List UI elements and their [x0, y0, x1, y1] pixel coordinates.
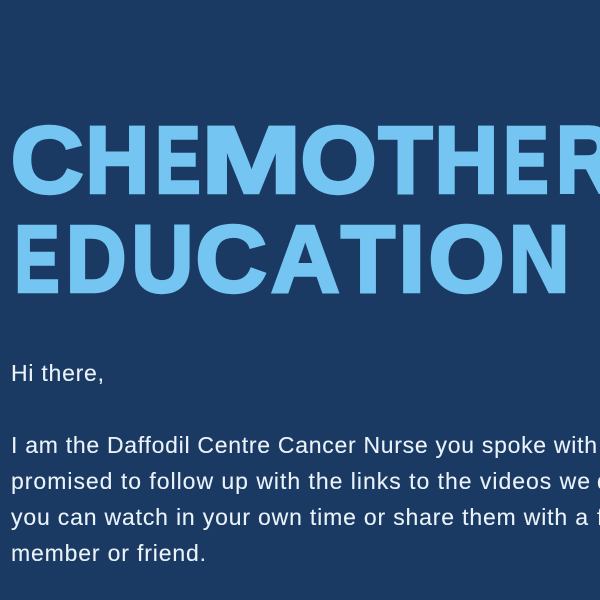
title line 2: education	[14, 205, 569, 313]
title line 2: education: N	[509, 206, 569, 312]
body paragraph: you can watch in your own time or share them with a	[11, 504, 588, 530]
title line 1: chemotherapy: T	[378, 108, 432, 213]
title line 2: education: T	[341, 207, 395, 312]
title line 1: chemotherapy: H	[86, 108, 149, 213]
greeting: Hi there,	[11, 360, 104, 386]
body paragraph: I am the Daffodil Centre Cancer Nurse you spoke with	[11, 432, 597, 458]
body paragraph: promised to follow up with the links to the videos we	[11, 468, 590, 494]
title line 2: education: U	[132, 206, 193, 313]
title	[11, 106, 600, 313]
title line 1: chemotherapy: E	[156, 107, 200, 213]
title line 1: chemotherapy: M	[202, 106, 301, 213]
title line 1: chemotherapy	[11, 106, 600, 213]
title line 2: education: O	[428, 207, 505, 312]
title line 2: education: I	[398, 206, 425, 312]
title line 2: education: A	[271, 206, 340, 312]
title line 2: education: E	[14, 206, 59, 312]
body paragraph	[11, 432, 600, 566]
title line 1: chemotherapy: E	[504, 107, 548, 213]
title line 2: education: C	[196, 205, 267, 312]
title line 1: chemotherapy: H	[434, 108, 498, 213]
title line 2: education: D	[66, 206, 126, 312]
title line 1: chemotherapy: C	[11, 106, 84, 213]
title line 1: chemotherapy: O	[300, 108, 377, 213]
body paragraph: member or friend.	[11, 540, 206, 566]
